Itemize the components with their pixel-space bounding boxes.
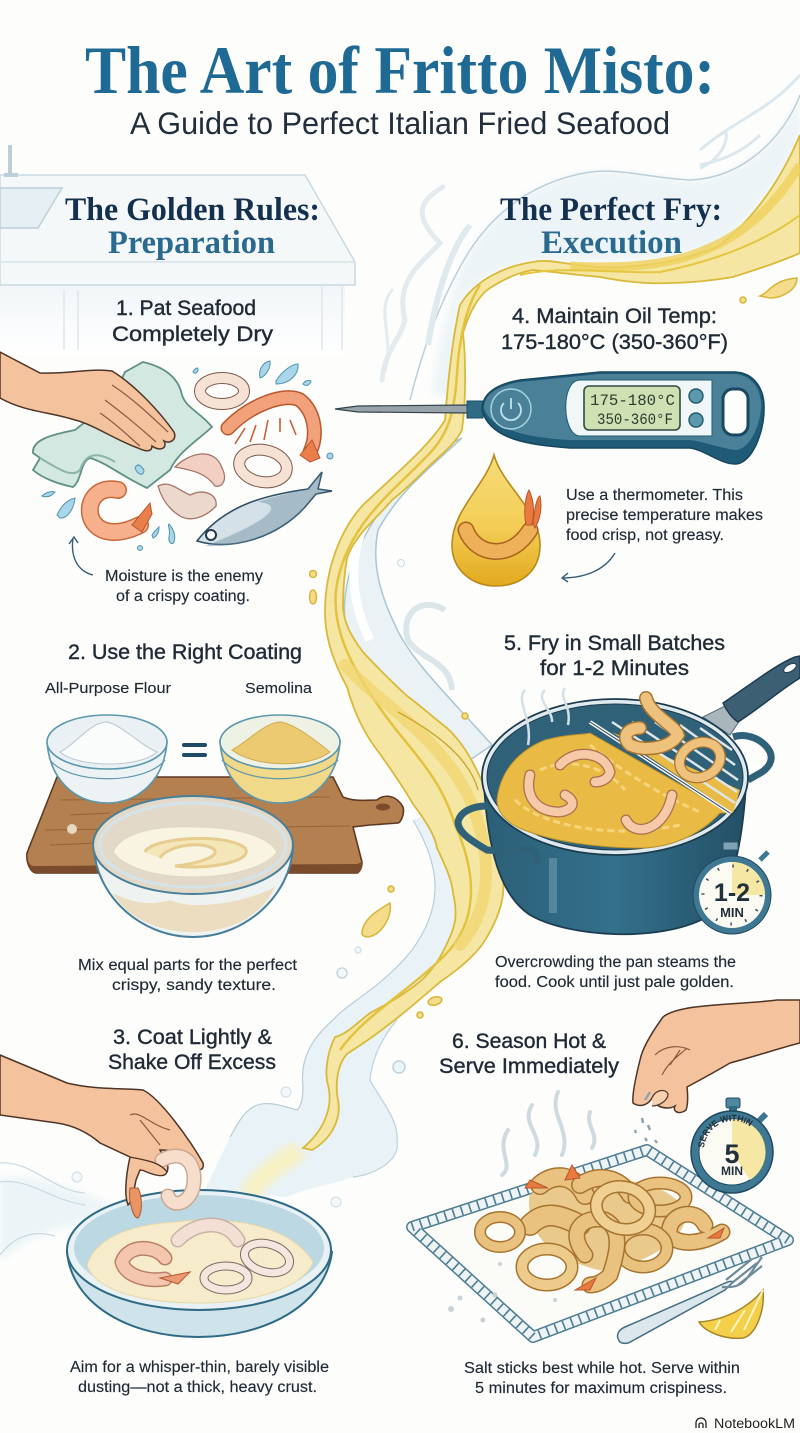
coating bowl [67,1190,332,1337]
step 3 heading [108,1025,276,1074]
oil droplets along ribbon [310,278,797,1073]
heading: execution: The Perfect Fry: [500,192,722,228]
step 1 heading: 1. Pat Seafood [116,296,256,320]
step 4 note: precise temperature makes [566,507,763,524]
power button [491,389,531,429]
towel [33,362,212,488]
raw shrimp in oil [560,754,610,782]
hand sprinkling salt [633,1000,800,1172]
step 3 note [70,1359,329,1396]
label: flour: All-Purpose Flour [45,680,171,697]
timer 1-2 min [693,842,771,934]
step 6 heading: Serve Immediately [439,1054,619,1078]
equals sign [182,743,207,757]
step 3 heading: 3. Coat Lightly & [113,1025,272,1049]
label: semolina: Semolina [245,680,313,697]
step 1 heading: Completely Dry [112,322,273,346]
flour bowl [47,715,167,803]
semolina bowl [220,715,340,803]
hand [0,352,175,451]
right handle [733,736,771,780]
steam wisps [382,187,443,380]
finger lines [100,385,168,446]
thermometer [335,372,764,464]
heading: preparation [65,192,320,261]
fish fillets [175,454,224,486]
step 4 note: food crisp, not greasy. [566,527,724,544]
step 4 heading: 175-180°C (350-360°F) [501,330,728,354]
thermometer: 350-360°F [597,411,673,429]
step 4 note [566,487,763,544]
step 3 note: dusting—not a thick, heavy crust. [78,1379,317,1396]
step 4 note: Use a thermometer. This [566,487,743,504]
stopwatch serve within 5 min: MIN [721,1164,743,1178]
floured rings [204,1266,248,1290]
mist stream upper [410,75,800,400]
mixing bowl [93,796,293,937]
step 3 heading: Shake Off Excess [108,1050,276,1074]
arrow: moisture [69,537,93,575]
crumbs [448,1262,557,1322]
fish [197,472,332,544]
subtitle: A Guide to Perfect Italian Fried Seafood [130,105,670,141]
fried shrimp on rack [626,698,678,748]
kitchen counter backdrop [0,145,355,355]
step 2 heading: 2. Use the Right Coating [68,640,302,664]
shrimp top [228,398,314,452]
frying pot [458,656,800,934]
mist waves bottom left [0,1087,341,1262]
under rack oil [612,732,740,813]
gold oil ribbon [303,135,800,1150]
step 5 heading [504,631,725,680]
step 2 note [78,957,298,994]
fried ring on rack [674,736,726,784]
step 6 heading [439,1029,619,1078]
timer 1-2 min: MIN [720,905,744,920]
oil drop with shrimp [452,455,541,586]
thermometer: 175-180°C [590,392,675,410]
left handle [458,806,537,863]
step 4 heading: 4. Maintain Oil Temp: [512,304,717,328]
pot rim [482,699,748,855]
step 5 heading: 5. Fry in Small Batches [504,631,725,655]
step 1 note: of a crispy coating. [116,588,250,605]
notebooklm watermark: NotebookLM [714,1415,795,1431]
heading: preparation: The Golden Rules: [65,192,320,228]
metal bracket [703,705,740,735]
step 6 note: 5 minutes for maximum crispiness. [475,1380,727,1397]
title: The Art of Fritto Misto: [85,32,715,108]
shrimp bottom [90,489,140,532]
step 6 note [464,1360,740,1397]
mist stream middle [344,438,492,760]
wire rack [612,722,738,803]
hand with shrimp [0,1055,203,1218]
step 1 note [105,568,263,605]
steam [522,688,569,745]
squid ring 2 [237,446,289,486]
step 5 note: Overcrowding the pan steams the [495,954,736,971]
cutting board [27,777,403,873]
long handle [723,656,800,722]
step 1 note: Moisture is the enemy [105,568,263,585]
water drops [42,361,333,550]
heading: execution [500,192,722,261]
step 4 heading [501,304,728,354]
step 2 note: Mix equal parts for the perfect [78,957,298,974]
heading: preparation: Preparation [108,225,275,261]
illustration: cloth, hand and seafood [0,352,333,550]
stopwatch serve within 5 min: SERVE WITHIN [698,1114,753,1148]
lemon wedge [699,1290,763,1338]
step 1 heading [112,296,273,346]
mist stream lower [205,810,470,1197]
stopwatch serve within 5 min: 5 [724,1139,740,1169]
oil [497,733,730,848]
pot body [484,785,746,934]
floured shrimp [122,1248,165,1280]
step 5 heading: for 1-2 Minutes [540,656,689,680]
timer 1-2 min: 1-2 [714,879,750,907]
stopwatch serve within 5 min [690,1098,774,1194]
step 3 note: Aim for a whisper-thin, barely visible [70,1359,329,1376]
step 2 note: crispy, sandy texture. [112,977,276,994]
step 5 note: food. Cook until just pale golden. [495,974,734,991]
lcd display [584,386,680,430]
step 5 note [495,954,736,991]
wire rack with paper [412,1150,788,1337]
fried calamari and shrimp pile [480,1165,724,1290]
step 6 note: Salt sticks best while hot. Serve within [464,1360,740,1377]
fork [618,1257,762,1343]
step 6 heading: 6. Season Hot & [452,1029,606,1053]
steam [502,1092,594,1175]
heading: execution: Execution [541,225,682,261]
arrow: thermometer note [562,553,615,582]
squid ring 1 [200,378,244,404]
